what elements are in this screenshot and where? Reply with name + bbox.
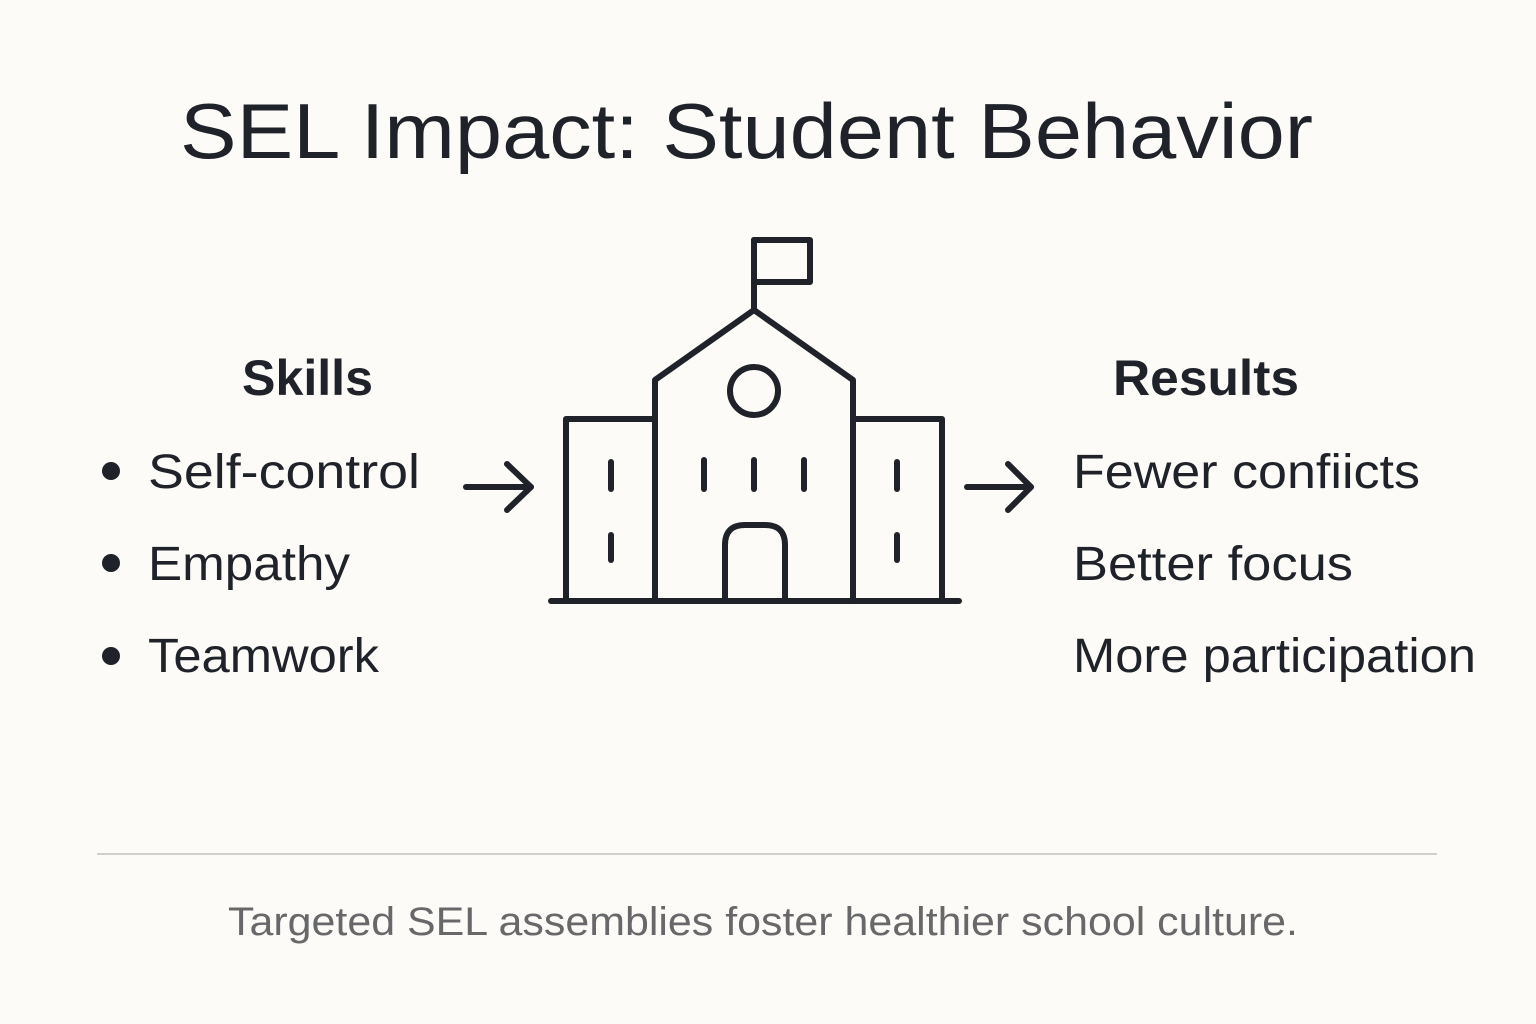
result item: better focus: Better focus — [1073, 538, 1353, 591]
skill item: empathy: Empathy — [148, 538, 350, 591]
result item: more participation: More participation — [1073, 630, 1476, 683]
result item: fewer conflicts: Fewer confiicts — [1073, 446, 1420, 499]
arrow: school to results — [967, 464, 1031, 510]
skill item: self-control: Self-control — [148, 446, 420, 499]
heading: skills: Skills — [242, 350, 373, 406]
skill item: teamwork: Teamwork — [148, 630, 380, 683]
panel: skills — [102, 350, 420, 683]
arrow: skills to school — [466, 464, 531, 510]
footer caption: Targeted SEL assemblies foster healthier school culture. — [228, 900, 1298, 944]
heading: results: Results — [1113, 350, 1299, 406]
panel: results — [1073, 350, 1476, 683]
title: SEL Impact: Student Behavior — [180, 87, 1313, 175]
icon: school building — [551, 240, 959, 601]
